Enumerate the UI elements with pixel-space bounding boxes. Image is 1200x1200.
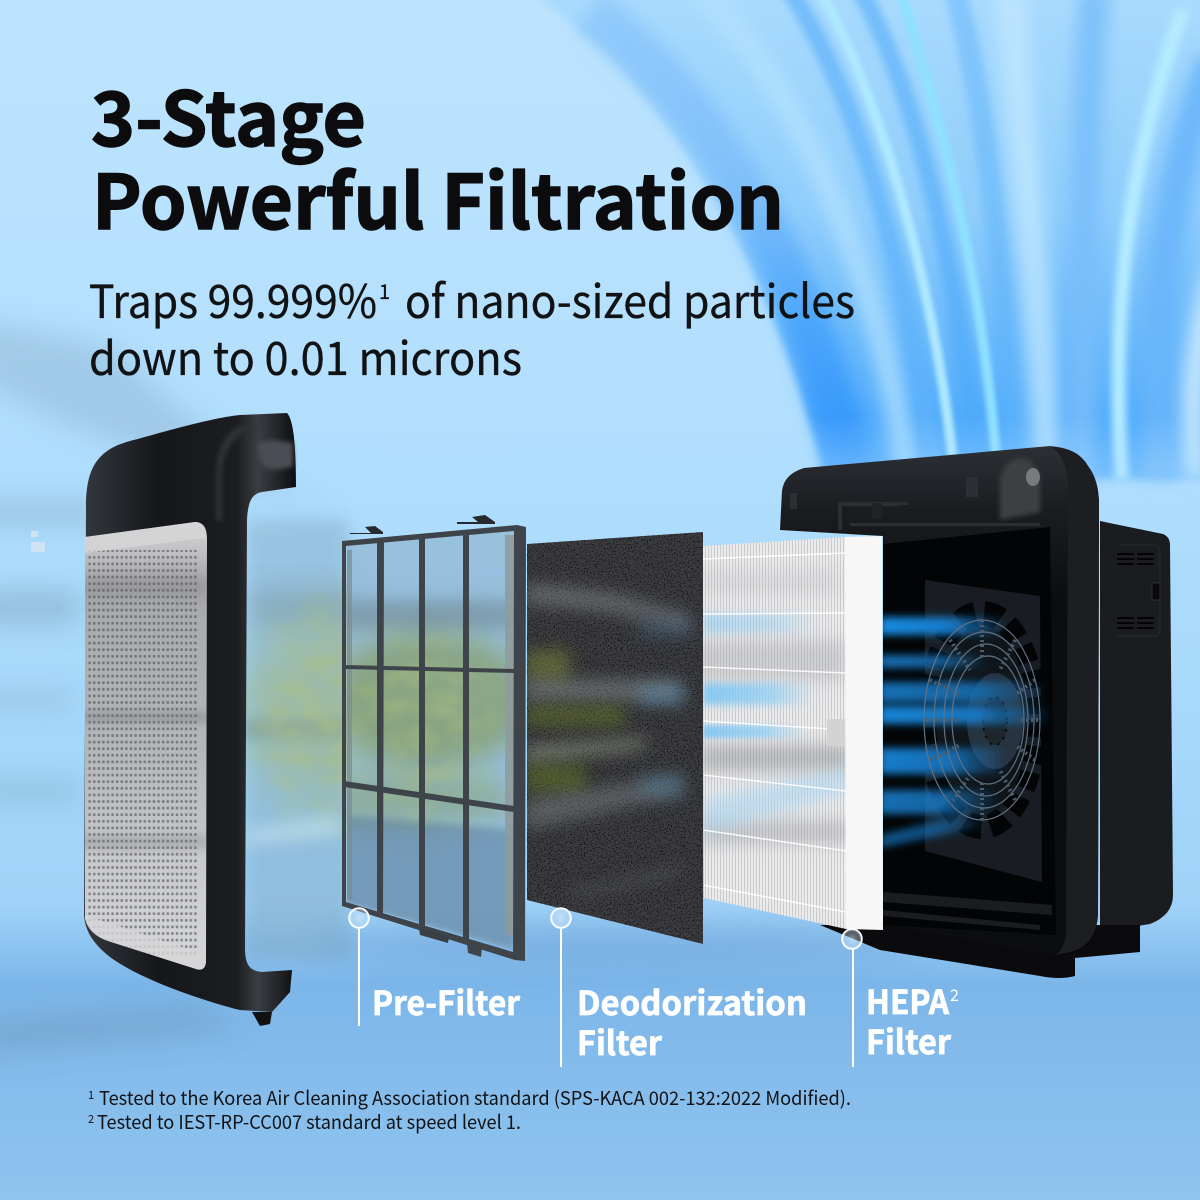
rear body of purifier [780,446,1173,978]
fan blades [929,613,1035,827]
subtitle [89,266,855,389]
pre-filter clips [350,515,495,534]
rear housing side [1100,521,1173,932]
hepa pleats [703,537,846,929]
callout: pre-filter: Pre-Filter [372,977,521,1025]
air streaks, left side [0,320,340,1055]
callout: pre-filter [349,908,521,1026]
hepa filter [695,536,883,930]
title: Powerful Filtration [92,142,784,251]
subtitle: Traps 99.999% [89,266,377,332]
callout: deodorization filter: Filter [577,1017,663,1065]
pre-filter mesh panes [347,531,514,950]
air swirl streams, upper right [525,0,1200,480]
subtitle: 1 [379,276,390,305]
pre-filter [342,515,526,961]
subtitle: of nano-sized particles [405,266,855,332]
clean air streams [880,617,1050,848]
icon: small marks at left edge [31,531,45,552]
callout: deodorization filter [551,908,807,1067]
dirty air between panel and pre-filter [240,520,520,960]
deodorization filter [525,532,703,944]
title [91,59,784,251]
title: 3-Stage [91,59,366,168]
fan grille [924,620,1040,820]
callout: hepa filter [842,929,959,1067]
footnotes: 1 [88,1087,94,1103]
deodorization wisps [525,582,690,630]
hepa tag [827,719,845,746]
front frame [780,446,1099,955]
perforated silver plate [85,522,207,970]
footnotes [88,1084,851,1135]
rear foot [820,925,1140,978]
footnotes: Tested to the Korea Air Cleaning Association standard (SPS-KACA 002-132:2022 Modified). [99,1084,851,1111]
callout: hepa filter: 2 [950,982,959,1006]
footnotes: 2 [88,1111,94,1127]
panel body [84,413,296,1012]
front panel [80,413,296,1026]
footnotes: Tested to IEST-RP-CC007 standard at speed level 1. [97,1108,521,1135]
pre-filter frame [342,525,526,961]
lower interior parts [883,892,1052,915]
hepa white side [845,536,883,930]
panel highlight [258,440,293,470]
interior and fan [880,525,1060,955]
rear housing vents [1117,553,1160,629]
subtitle: down to 0.01 microns [89,323,522,389]
top clips [790,477,1040,530]
callout: hepa filter: Filter [866,1016,952,1064]
panel foot [252,1012,272,1026]
callout: deodorization filter: Deodorization [577,977,807,1025]
top gloss highlight [1000,458,1040,520]
hepa air streaks [695,640,845,680]
fan hub [967,673,1023,769]
callout: hepa filter: HEPA [866,976,950,1024]
floor shadow [320,923,920,967]
